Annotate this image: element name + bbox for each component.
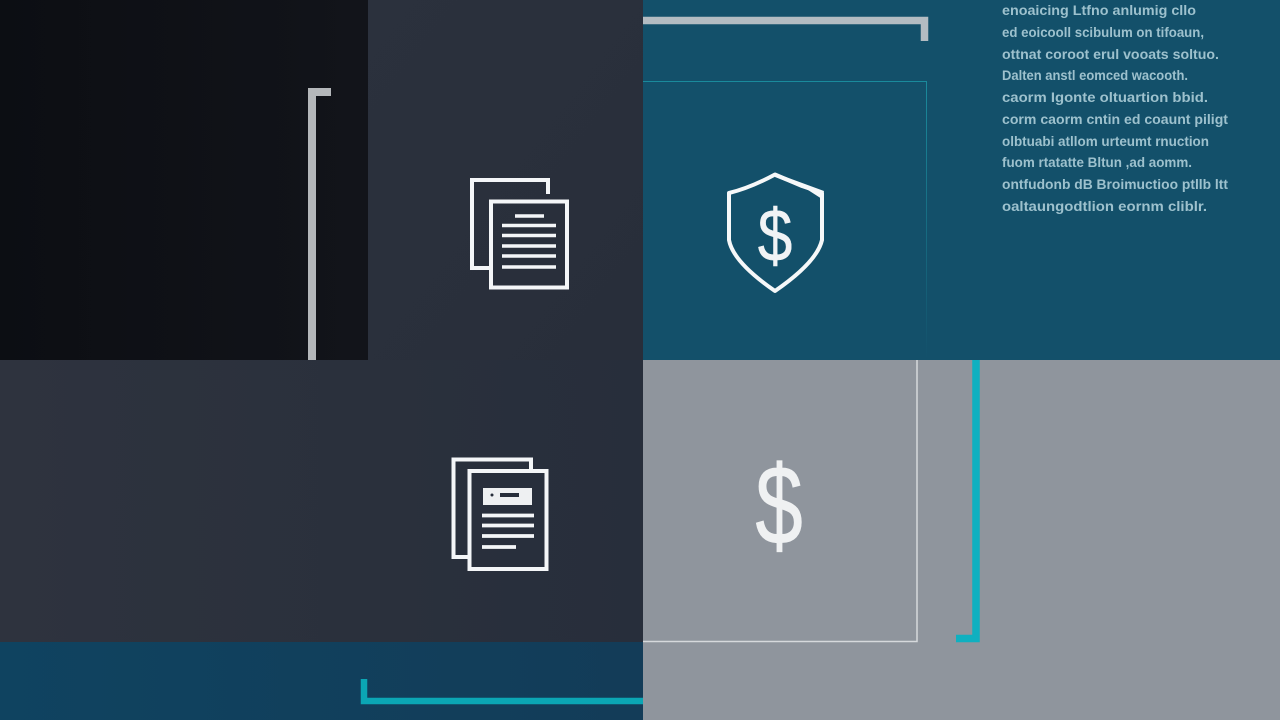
- panel: slate top-centre: [368, 0, 643, 360]
- icon: shield with dollar sign: [729, 173, 824, 291]
- panel: slate lower-left: [0, 360, 643, 642]
- grey bracket: [312, 92, 331, 360]
- icon: stacked documents with banner: [454, 460, 546, 569]
- panel: black top-left: [0, 0, 368, 360]
- text block: fuom rtatatte Bltun ,ad aomm.: [1002, 155, 1192, 170]
- text block: enoaicing Ltfno anlumig cllo: [1002, 3, 1196, 18]
- thin teal frame: [643, 82, 926, 360]
- text block: oaltaungodtlion eornm cliblr.: [1002, 199, 1207, 214]
- cyan bracket: [956, 360, 976, 638]
- icon: shield with dollar sign: $: [758, 195, 792, 277]
- cyan bracket: [364, 679, 643, 701]
- panel: teal top-right: [643, 0, 1280, 360]
- text block: ontfudonb dB Broimuctioo ptllb ltt: [1002, 177, 1229, 192]
- grey corner bracket: [643, 20, 924, 41]
- text block: [1002, 3, 1229, 214]
- text block: ottnat coroot erul vooats soltuo.: [1002, 47, 1219, 62]
- icon: dollar sign: $: [755, 444, 803, 569]
- text block: ed eoicooll scibulum on tifoaun,: [1002, 25, 1204, 40]
- thin white frame: [643, 360, 917, 642]
- text block: olbtuabi atllom urteumt rnuction: [1002, 134, 1209, 149]
- panel: navy footer band: [0, 642, 643, 720]
- text block: Dalten anstl eomced wacooth.: [1002, 68, 1188, 83]
- panel: grey lower-right: [643, 360, 1280, 720]
- icon: stacked documents with text lines: [472, 180, 567, 288]
- text block: corm caorm cntin ed coaunt piligt: [1002, 112, 1229, 127]
- text block: caorm Igonte oltuartion bbid.: [1002, 90, 1208, 105]
